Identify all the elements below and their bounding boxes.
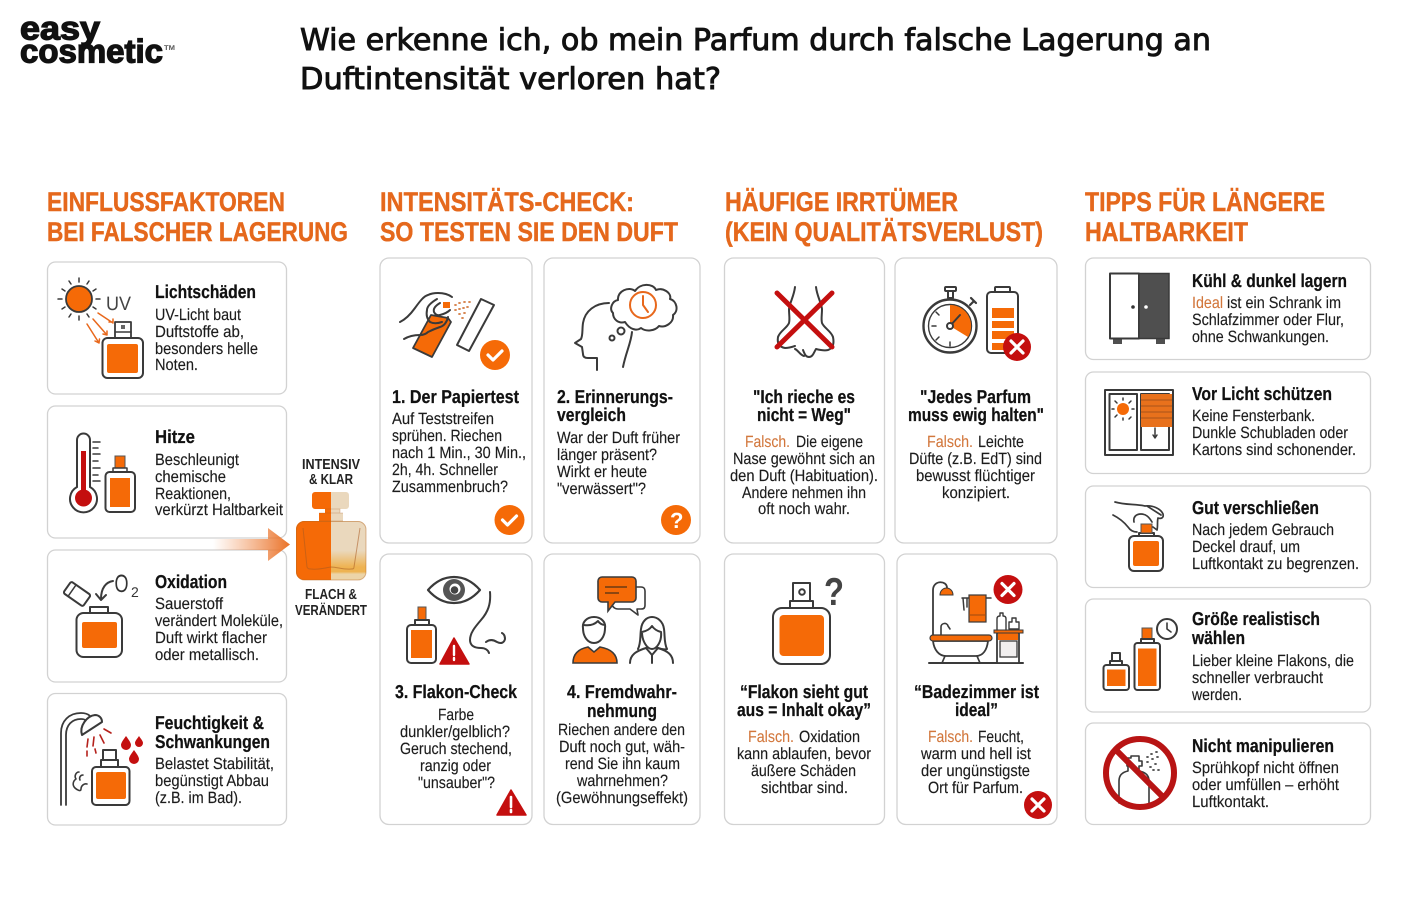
text: Nicht manipulieren: oder umfüllen – erhöht [1192,776,1339,794]
text: Erinnerungsvergleich: War der Duft früher [557,429,681,447]
heading: Intensitäts-Check [380,187,678,247]
text: Flakon sieht gut aus: aus = Inhalt okay” [737,699,871,720]
text: Badezimmer: der ungünstigste [921,762,1030,780]
text: Kühl und dunkel: ist ein Schrank im [1227,294,1341,312]
text: Vor Licht schützen: Kartons sind schonender. [1192,441,1356,459]
text: Nicht manipulieren: Sprühkopf nicht öffnen [1192,759,1339,777]
text: Gut verschließen: Nach jedem Gebrauch [1192,521,1334,539]
panel: Der Papiertest [380,258,532,543]
text: Erinnerungsvergleich: 2. Erinnerungs- [557,386,673,407]
text: Fremdwahrnehmung: 4. Fremdwahr- [567,681,677,702]
text: Oxidation: Duft wirkt flacher [155,629,268,647]
text: Oxidation: Oxidation [155,571,227,592]
label: flach und verändert: VERÄNDERT [295,602,367,619]
logo: easycosmetic: cosmetic [20,32,163,70]
text: Hitze: Beschleunigt [155,451,239,469]
text: Badezimmer: “Badezimmer ist [914,681,1039,702]
logo: easycosmetic: easy [20,10,101,46]
text: Oxidation: oder metallisch. [155,646,259,664]
text: Ich rieche es nicht: den Duft (Habituation). [730,467,878,485]
text: Hitze: verkürzt Haltbarkeit [155,501,283,519]
text: Flakon sieht gut aus: kann ablaufen, bevor [737,745,872,763]
icon: thermometer and bottle [70,434,135,512]
text: Feuchtigkeit: (z.B. im Bad). [155,789,242,807]
heading: Tipps [1085,187,1325,247]
panel: Flakon-Check [380,554,532,824]
text: Jedes Parfum: Falsch. [927,433,973,451]
text: Der Papiertest: Zusammenbruch? [392,478,508,496]
text: Nicht manipulieren: Luftkontakt. [1192,793,1269,811]
icon: question badge [661,505,691,535]
panel: Nicht manipulieren [1086,723,1370,824]
text: Größe realistisch: Lieber kleine Flakons, die [1192,652,1354,670]
text: Kühl und dunkel: Schlafzimmer oder Flur, [1192,311,1344,329]
text: Der Papiertest [392,386,526,496]
heading: Intensitäts-Check: SO TESTEN SIE DEN DUFT [380,217,678,247]
text: Fremdwahrnehmung: nehmung [587,700,657,721]
text: Größe realistisch: wählen [1191,627,1245,648]
text: Kühl und dunkel: ohne Schwankungen. [1192,328,1329,346]
text: Badezimmer: Falsch. [928,728,973,746]
text: Flakon sieht gut aus: sichtbar sind. [761,779,848,797]
icon: open bottle with oxygen: 2 [131,584,139,600]
text: Flakon sieht gut aus: Oxidation [799,728,860,746]
panel: Größe realistisch [1086,599,1370,712]
text: Kühl und dunkel [1192,270,1347,346]
text: Feuchtigkeit [155,712,274,807]
text: Badezimmer [914,681,1039,797]
text: Ich rieche es nicht: oft noch wahr. [758,500,850,518]
text: Vor Licht schützen: Vor Licht schützen [1192,383,1332,404]
text: Feuchtigkeit: begünstigt Abbau [155,772,269,790]
icon: wardrobe [1110,274,1169,344]
text: Größe realistisch: werden. [1191,686,1242,704]
panel: Badezimmer [897,554,1057,824]
panel: Kühl und dunkel [1086,258,1370,360]
panel: Ich rieche es nicht [724,258,884,543]
text: Vor Licht schützen: Dunkle Schubladen oder [1192,424,1348,442]
text: Kühl und dunkel: Kühl & dunkel lagern [1192,270,1347,291]
arrow: into bottle [213,528,290,561]
text: Ich rieche es nicht: "Ich rieche es [753,386,855,407]
text: Flakon sieht gut aus [737,681,872,797]
text: Nicht manipulieren [1192,735,1339,811]
text: Jedes Parfum: konzipiert. [942,484,1010,502]
text: Jedes Parfum: Leichte [978,433,1024,451]
label: intensiv und klar: & KLAR [309,472,353,488]
label: flach und verändert [295,587,367,619]
panel: Jedes Parfum [895,258,1057,543]
icon: small and large bottle with clock [1104,619,1177,690]
icon: spraying on test strip [400,293,510,370]
icon: shower and bottle [61,713,143,805]
text: Fremdwahrnehmung: Duft noch gut, wäh- [559,738,685,756]
label: intensiv und klar [302,457,360,488]
icon: hand closing bottle [1113,502,1163,571]
text: Der Papiertest: 1. Der Papiertest [392,386,519,407]
text: Flakon-Check: dunkler/gelblich? [400,723,510,741]
text: Ich rieche es nicht [730,386,878,518]
text: Ich rieche es nicht: Falsch. [745,433,790,451]
text: Vor Licht schützen: Keine Fensterbank. [1192,407,1315,425]
text: Der Papiertest: 2h, 4h. Schneller [392,461,498,479]
icon: question badge: ? [670,508,683,533]
text: Hitze: chemische [155,468,226,486]
icon: warning triangle [497,790,526,815]
text: Gut verschließen: Gut verschließen [1192,497,1319,518]
text: Der Papiertest: Auf Teststreifen [392,410,494,428]
text: Hitze: Reaktionen, [155,485,231,503]
text: Jedes Parfum: "Jedes Parfum [920,386,1031,407]
text: Feuchtigkeit: Belastet Stabilität, [155,755,274,773]
icon: eye, nose, bottle and warning [407,577,505,664]
text: Erinnerungsvergleich [557,386,681,498]
title: Wie erkenne ich, ob mein Parfum durch falsche Lagerung an [300,23,1211,58]
icon: red cross badge [1024,791,1052,819]
text: Hitze: Hitze [155,426,195,447]
panel: Lichtschäden [48,262,286,394]
logo: easycosmetic: TM [164,45,175,52]
text: Größe realistisch: Größe realistisch [1192,608,1320,629]
text: Feuchtigkeit: Schwankungen [155,731,270,752]
text: Oxidation [155,571,283,664]
text: Lichtschäden: Duftstoffe ab, [155,323,244,341]
text: Gut verschließen: Luftkontakt zu begrenzen. [1192,555,1359,573]
text: Erinnerungsvergleich: vergleich [557,404,626,425]
panel: Fremdwahrnehmung [544,554,700,824]
text: Fremdwahrnehmung: rend Sie ihn kaum [565,755,680,773]
logo: easycosmetic [20,10,175,70]
icon: check badge [494,505,524,535]
text: Erinnerungsvergleich: "verwässert"? [557,480,646,498]
icon: bottle with question mark: ? [824,571,844,614]
icon: crossed out nose [777,287,833,357]
text: Fremdwahrnehmung: (Gewöhnungseffekt) [556,789,688,807]
icon: prohibited spray bottle [1106,739,1174,807]
text: Größe realistisch [1191,608,1354,704]
text: Vor Licht schützen [1192,383,1356,459]
panel: Feuchtigkeit [48,694,286,825]
text: Nicht manipulieren: Nicht manipulieren [1192,735,1334,756]
icon: sun and bottle: UV [106,293,131,315]
icon: bathroom [929,575,1023,663]
text: Badezimmer: ideal” [955,699,998,720]
icon: window with blind [1105,390,1173,455]
text: Flakon sieht gut aus: äußere Schäden [751,762,856,780]
panel: Erinnerungsvergleich [544,258,700,543]
text: Oxidation: verändert Moleküle, [155,612,283,630]
heading: Häufige Irrtümer: (KEIN QUALITÄTSVERLUST) [725,217,1043,247]
text: Flakon-Check: "unsauber"? [418,774,495,792]
text: Kühl und dunkel: Ideal [1192,294,1223,312]
heading: Einflussfaktoren [47,187,348,247]
text: Badezimmer: Feucht, [978,728,1024,746]
text: Badezimmer: warm und hell ist [920,745,1031,763]
heading: Häufige Irrtümer: HÄUFIGE IRRTÜMER [725,187,958,217]
title: Duftintensität verloren hat? [300,62,721,97]
heading: Tipps: TIPPS FÜR LÄNGERE [1085,187,1325,217]
text: Der Papiertest: nach 1 Min., 30 Min., [392,444,526,462]
text: Feuchtigkeit: Feuchtigkeit & [155,712,264,733]
panel: Oxidation [48,550,286,682]
icon: open bottle with oxygen: O [114,570,128,598]
text: Ich rieche es nicht: nicht = Weg" [757,404,851,425]
icon: stopwatch and battery [924,287,1031,361]
text: Fremdwahrnehmung: wahrnehmen? [576,772,668,790]
text: Flakon sieht gut aus: Falsch. [748,728,794,746]
text: Lichtschäden: besonders helle [155,340,258,358]
text: Flakon-Check: Farbe [438,706,474,724]
icon: two people talking [573,577,673,663]
text: Flakon-Check: 3. Flakon-Check [395,681,518,702]
text: Jedes Parfum: Düfte (z.B. EdT) sind [909,450,1042,468]
text: Erinnerungsvergleich: Wirkt er heute [557,463,647,481]
panel: Hitze [48,406,286,538]
icon: half-faded perfume bottle [296,492,366,580]
label: flach und verändert: FLACH & [305,587,357,603]
text: Ich rieche es nicht: Andere nehmen ihn [742,484,866,502]
text: Lichtschäden: UV-Licht baut [155,306,241,324]
text: Lichtschäden [155,281,258,374]
heading: Einflussfaktoren: BEI FALSCHER LAGERUNG [47,217,348,247]
text: Größe realistisch: schneller verbraucht [1192,669,1323,687]
text: Jedes Parfum: muss ewig halten" [908,404,1044,425]
icon: head with thought cloud [575,285,677,370]
text: Badezimmer: Ort für Parfum. [928,779,1023,797]
text: Flakon-Check: Geruch stechend, [400,740,512,758]
icon: bottle with question mark [773,571,844,664]
text: Gut verschließen [1192,497,1359,573]
panel: Gut verschließen [1086,486,1370,588]
text: Flakon sieht gut aus: “Flakon sieht gut [740,681,868,702]
heading: Einflussfaktoren: EINFLUSSFAKTOREN [47,187,285,217]
text: Fremdwahrnehmung [556,681,688,807]
text: Jedes Parfum [908,386,1044,502]
heading: Häufige Irrtümer [725,187,1043,247]
text: Lichtschäden: Lichtschäden [155,281,256,302]
title [300,23,1211,97]
text: Fremdwahrnehmung: Riechen andere den [558,721,685,739]
text: Ich rieche es nicht: Nase gewöhnt sich an [733,450,875,468]
text: Jedes Parfum: bewusst flüchtiger [916,467,1036,485]
panel: Vor Licht schützen [1086,372,1370,474]
text: Hitze [155,426,283,519]
icon: open bottle with oxygen [63,570,139,657]
label: intensiv und klar: INTENSIV [302,457,360,473]
text: Erinnerungsvergleich: länger präsent? [557,446,657,464]
panel: Flakon sieht gut aus [724,554,884,824]
text: Ich rieche es nicht: Die eigene [796,433,863,451]
heading: Tipps: HALTBARKEIT [1085,217,1248,247]
text: Flakon-Check [395,681,518,792]
text: Der Papiertest: sprühen. Riechen [392,427,502,445]
icon: sun and bottle [58,278,143,378]
text: Lichtschäden: Noten. [155,356,198,374]
text: Oxidation: Sauerstoff [155,595,223,613]
heading: Intensitäts-Check: INTENSITÄTS-CHECK: [380,187,634,217]
text: Gut verschließen: Deckel drauf, um [1192,538,1300,556]
text: Flakon-Check: ranzig oder [420,757,491,775]
